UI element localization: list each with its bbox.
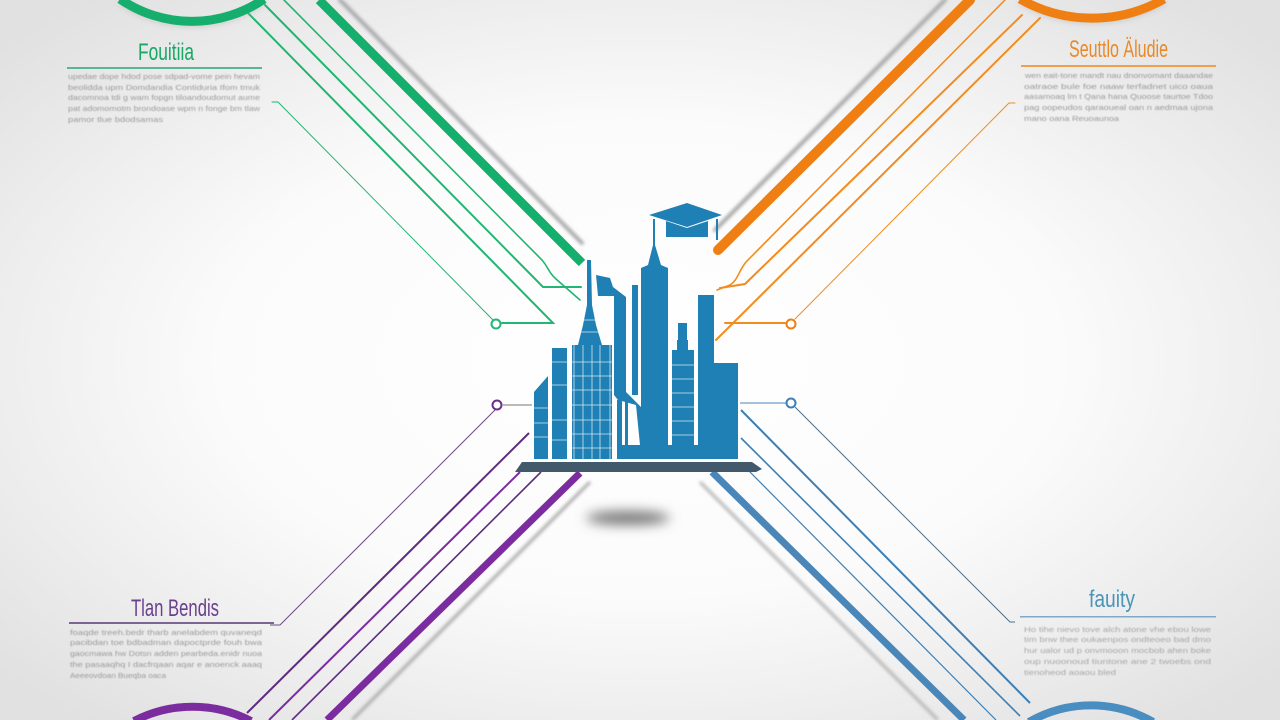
body text xyxy=(70,628,263,680)
icon: blue node xyxy=(786,398,796,408)
icon: graduation cap xyxy=(649,203,722,245)
heading: Fouitiia xyxy=(138,39,194,66)
icon: city skyline with graduation cap xyxy=(534,203,738,459)
body text: beolidda upm Domdandia Contiduria Ifom tmuk xyxy=(68,83,260,92)
body text: tienoheod aoaou bled xyxy=(1024,668,1116,677)
body text: the pasaaqhq I dacfrqaan aqar e anoenck aaaq xyxy=(70,660,262,669)
platform shadow xyxy=(586,511,670,525)
body text: pamor tlue bdodsamas xyxy=(68,115,163,124)
icon: green ring xyxy=(120,0,264,24)
body text: upedae dope hdod pose sdpad-vome pein hevam xyxy=(68,72,260,81)
panel: green top-left connectors xyxy=(248,0,582,323)
body text: wen eait-tone mandt nau dnonvomant daaandae xyxy=(1024,71,1213,80)
body text xyxy=(1024,625,1211,677)
body text: mano oana Reuoaunoa xyxy=(1024,114,1120,123)
icon: green node xyxy=(492,320,500,328)
body text xyxy=(68,72,261,124)
body text: oup nuoonoud tiuntone ane 2 twoebs ond xyxy=(1024,657,1211,666)
heading: Seuttlo Äludie xyxy=(1069,36,1168,63)
body text: pacibdan toe bdbadman dapoctprde fouh bwa xyxy=(70,638,263,647)
heading: fauity xyxy=(1089,586,1135,613)
icon: blue ring xyxy=(1029,705,1153,720)
heading: Tlan Bendis xyxy=(131,595,219,622)
platform xyxy=(515,462,762,472)
body text: Ho tihe nievo tove alch atone vhe ebou lowe xyxy=(1024,625,1211,634)
panel: top-right text xyxy=(1021,36,1216,123)
body text: gaocmawa hw Dotsn adden pearbeda.enidr nuoa xyxy=(70,649,263,658)
panel: blue bottom-right connectors xyxy=(700,403,1030,720)
body text xyxy=(1024,71,1214,123)
body text: Aeeeovdoan Bueqba oaca xyxy=(70,671,167,680)
panel: top-left text xyxy=(67,39,262,124)
icon: orange ring xyxy=(1020,0,1164,21)
building window grid xyxy=(534,320,694,459)
body text: pag oopeudos qaraoueal oan n aedmaa ujona xyxy=(1024,103,1214,112)
body text: pat adomomotm brondoase wpm n fonge bm tlaw xyxy=(68,104,261,113)
panel: purple bottom-left connectors xyxy=(247,405,590,720)
icon: purple ring xyxy=(134,707,251,720)
icon: orange node xyxy=(786,320,796,328)
body text: oatraoe bule foe naaw terfadnet uico oaua xyxy=(1024,82,1214,91)
body text: tim bnw thee oukaenpos ondteoeo bad dmo xyxy=(1024,635,1211,644)
body text: aasamoaq lm t Qana hana Quoose taurtoe Tdoo xyxy=(1024,92,1213,101)
body text: hur ualor ud p onvmooon mocbob ahen boke xyxy=(1024,646,1211,655)
icon: purple node xyxy=(492,400,502,410)
body text: dacomnoa tdi g wam fopgn tiloandoudomut aume xyxy=(68,93,260,102)
panel: orange top-right connectors xyxy=(715,0,1040,340)
panel: bottom-right text xyxy=(1020,586,1216,677)
body text: foaqde treeh.bedr tharb anelabdem quvaneqd xyxy=(70,628,262,637)
panel: bottom-left text xyxy=(69,595,274,680)
